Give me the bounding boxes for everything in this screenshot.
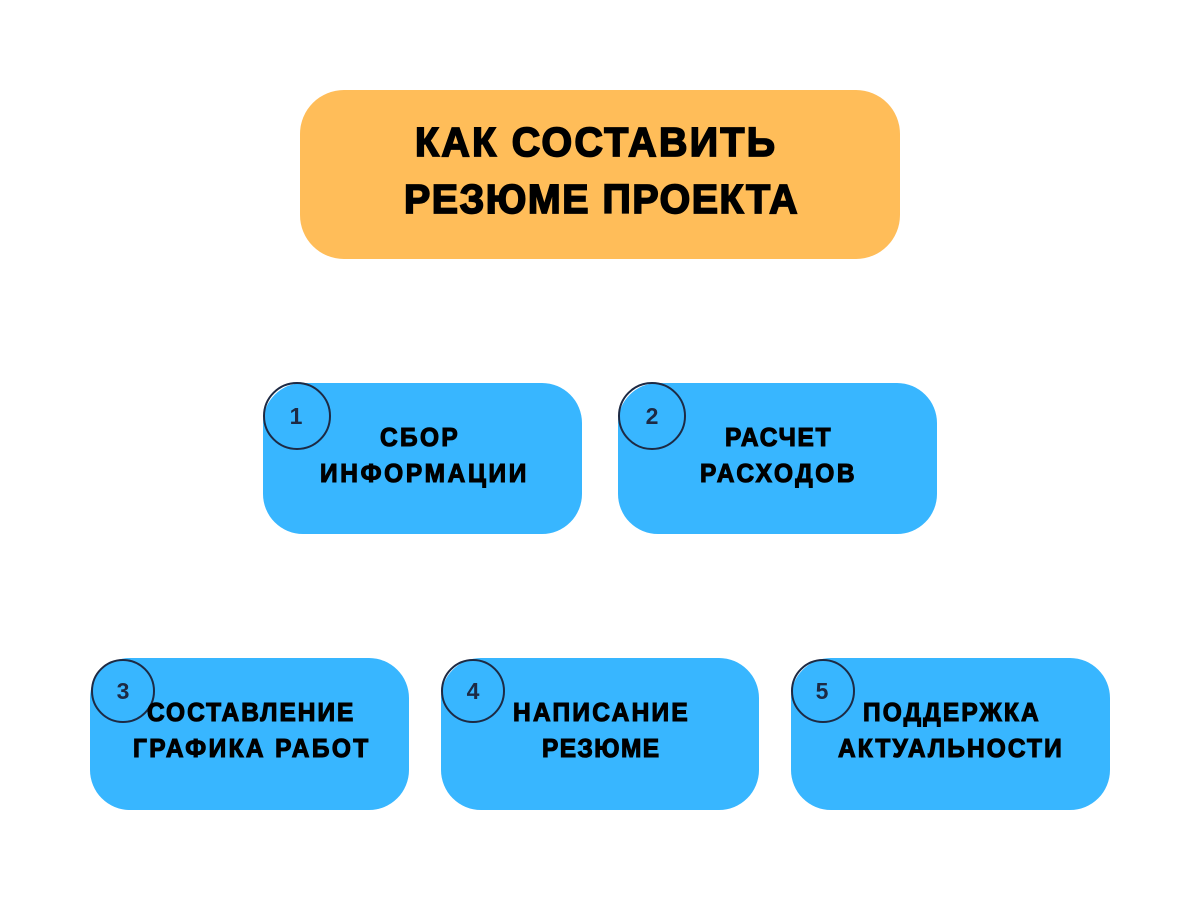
step 1 label: ИНФОРМАЦИИ (320, 460, 526, 488)
title (404, 119, 798, 222)
step 2 label (700, 424, 855, 488)
step 4 number badge: 4 (467, 678, 480, 704)
step 2 number badge (619, 383, 685, 449)
step 5 number badge (792, 660, 854, 722)
step 1 label (320, 424, 526, 488)
step 3 label: СОСТАВЛЕНИЕ (147, 699, 353, 727)
step 4 card (441, 658, 759, 810)
step 5 number badge: 5 (816, 678, 829, 704)
step 5 card (791, 658, 1110, 810)
step 4 label: НАПИСАНИЕ (513, 699, 688, 727)
step 5 label: ПОДДЕРЖКА (863, 699, 1039, 727)
step 4 number badge (442, 660, 504, 722)
title: РЕЗЮМЕ ПРОЕКТА (404, 176, 798, 222)
title panel (300, 90, 900, 259)
step 5 label (838, 699, 1062, 763)
step 1 number badge: 1 (290, 403, 303, 429)
step 5 label: АКТУАЛЬНОСТИ (838, 735, 1062, 763)
step 2 number badge: 2 (646, 403, 658, 429)
step 1 card (263, 383, 582, 534)
step 4 label (513, 699, 688, 763)
step 2 label: РАСХОДОВ (700, 460, 855, 488)
step 2 card (618, 383, 937, 534)
step 3 card (90, 658, 409, 810)
step 2 label: РАСЧЕТ (725, 424, 831, 452)
step 1 number badge (264, 383, 330, 449)
step 4 label: РЕЗЮМЕ (542, 735, 659, 763)
step 1 label: СБОР (380, 424, 458, 452)
step 3 number badge (92, 660, 154, 722)
step 3 label: ГРАФИКА РАБОТ (133, 735, 368, 763)
step 3 number badge: 3 (117, 678, 129, 704)
step 3 label (133, 699, 368, 763)
title: КАК СОСТАВИТЬ (415, 119, 775, 165)
